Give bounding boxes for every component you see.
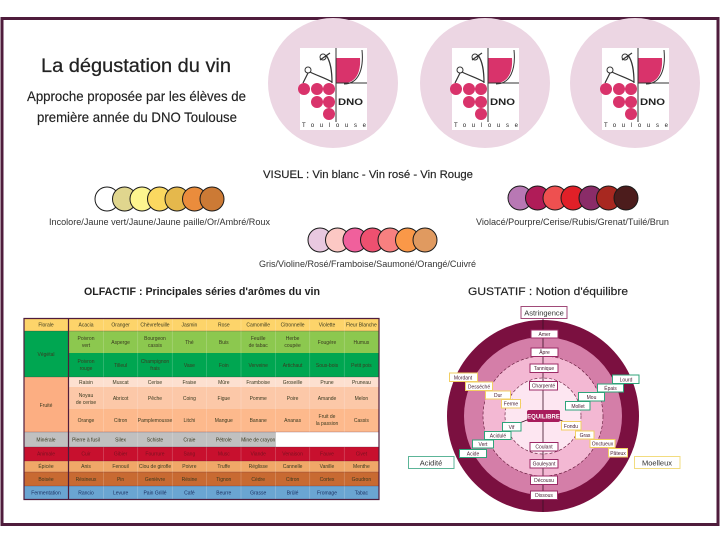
table: fruité rows: Groseille [283, 380, 303, 386]
table: végétal rows: frais [150, 366, 160, 372]
labels: jaune gauche: Dur [494, 393, 502, 399]
swatches: vin rouge [508, 186, 638, 210]
labels: axe vertical: Décousu [534, 478, 554, 484]
table: boisé row: Cortex [320, 477, 335, 483]
logo 1 [268, 18, 398, 148]
table: boisé row: Résineux [76, 477, 97, 483]
swatches: vin blanc [95, 187, 224, 211]
table: boisé row: Tignon [216, 477, 232, 483]
table: épicé row: Anis [81, 464, 91, 470]
logo 2: DNO [490, 97, 515, 107]
table: végétal rows: Bourgeon [144, 336, 166, 342]
table: header row: Camomille [246, 322, 270, 328]
table: végétal rows: Buis [219, 340, 229, 346]
table: fruité rows: Mûre [218, 380, 230, 386]
table: épicé row: Clou de girofle [139, 464, 171, 470]
label: vin rouge: Violacé/Pourpre/Cerise/Rubis/Grenat/Tuilé/Brun [476, 217, 669, 228]
table: fermentation row [31, 490, 369, 496]
table: fruité rows: Abricot [113, 396, 129, 402]
table: fruité rows: Cassis [354, 418, 369, 424]
table: minéral row [36, 438, 276, 444]
box: Moelleux [634, 456, 680, 468]
labels: axe vertical [532, 332, 556, 499]
logo 2: Toulouse [454, 123, 519, 129]
box: Acidité [408, 456, 454, 468]
label: vin blanc: Incolore/Jaune vert/Jaune/Jaune paille/Or/Ambré/Roux [49, 217, 270, 228]
labels: axe vertical: Tannique [534, 366, 554, 372]
table: fruité rows: Pomme [250, 396, 267, 402]
table: boisé row: Cèdre [251, 477, 265, 483]
table: épicé row: Réglisse [249, 464, 268, 470]
table: fruité rows: Citron [114, 418, 127, 424]
table: fermentation row: Pain Grillé [143, 490, 167, 496]
labels: vert droite [571, 378, 633, 410]
table: minéral row: Pétrole [216, 438, 232, 444]
table: épicé row: Épicée [38, 463, 54, 470]
table: animal row: Venaison [282, 452, 303, 458]
logo 3: DNO [640, 97, 665, 107]
table: végétal rows: rouge [80, 366, 93, 372]
table: fermentation row: Fermentation [31, 490, 61, 496]
table: minéral row: Craie [183, 438, 196, 444]
table: fermentation row: Rancio [78, 490, 94, 496]
table: végétal rows: Végétal [38, 352, 54, 358]
table: végétal rows: Foin [219, 363, 229, 369]
box: Astringence: Astringence [524, 308, 564, 318]
table: végétal rows: Sous-bois [316, 363, 339, 369]
table: animal row [37, 452, 368, 458]
table: animal row: Fourrure [145, 452, 165, 458]
labels: axe vertical: Amer [539, 332, 551, 338]
table: fermentation row: Brûlé [287, 490, 299, 496]
labels: jaune droite: Onctueux [592, 442, 614, 448]
table: fruité rows: Ananas [284, 418, 302, 424]
heading: olfactif: OLFACTIF : Principales séries d'arômes du vin [84, 286, 320, 298]
table: végétal rows: Feuille [251, 336, 266, 342]
table: animal row: Sang [184, 452, 195, 458]
labels: vert gauche [467, 425, 515, 458]
table: végétal rows: Poivron [78, 359, 95, 365]
table: animal row: Fauve [320, 452, 334, 458]
subtitle: Approche proposée par les élèves de [27, 88, 246, 104]
logo 2 [420, 18, 550, 148]
table: animal row: Cuir [81, 452, 91, 458]
box: Acidité: Acidité [420, 458, 442, 468]
table: végétal rows: coupée [284, 343, 301, 349]
table: boisé row: Genièvre [145, 477, 165, 483]
table: animal row: Viande [250, 452, 266, 458]
table: fermentation row: Levure [113, 490, 128, 496]
table: boisé row: Résine [182, 477, 197, 483]
table: fruité rows: Melon [355, 396, 368, 402]
boxes: vert gauche [460, 422, 521, 458]
table: header row: Violette [319, 322, 336, 328]
table: végétal rows: Tilleul [114, 363, 127, 369]
table: fruité rows: Poire [287, 396, 299, 402]
labels: vert gauche: Acide [467, 452, 479, 458]
table: fruité rows: Raisin [79, 380, 93, 386]
table: fermentation row: Tabac [355, 490, 369, 496]
table: boisé row: Citron [286, 477, 299, 483]
table: fermentation row: Fromage [317, 490, 337, 496]
table: header row: Chèvrefeuille [140, 322, 170, 328]
table: végétal rows: Humus [353, 340, 370, 346]
labels: vert gauche: Vert [479, 442, 488, 448]
heading: gustatif: GUSTATIF : Notion d'équilibre [468, 286, 628, 298]
table: végétal rows: Vase [184, 363, 195, 369]
table: végétal rows [38, 336, 372, 372]
table: végétal rows: Poivron [78, 336, 95, 342]
table: végétal rows: Verveine [248, 363, 268, 369]
table: fruité rows: Fruit de [319, 414, 336, 420]
box: Astringence [521, 306, 567, 318]
table: header row: Fleur Blanche [346, 322, 377, 328]
table: boisé row: Goudron [352, 477, 371, 483]
boxes: jaune gauche [450, 373, 520, 408]
labels: jaune droite: Fondu [564, 424, 578, 430]
labels: jaune droite [564, 424, 626, 457]
subtitle [27, 88, 246, 125]
labels: axe vertical: Dissous [535, 493, 553, 499]
table: fruité rows: Pêche [148, 396, 162, 402]
table: boisé row: Pin [117, 477, 124, 483]
labels: vert droite: Mou [587, 395, 597, 401]
table: fermentation row: Café [184, 490, 195, 496]
table: fruité rows: la passion [316, 421, 338, 427]
logo 3 [570, 18, 700, 148]
table: minéral row: Mine de crayon [241, 438, 276, 444]
table: fruité rows: Pruneau [352, 380, 371, 386]
table: épicé row: Fenouil [112, 464, 129, 470]
table: épicé row: Vanille [320, 464, 335, 470]
box: Moelleux: Moelleux [642, 458, 672, 468]
table: animal row: Gibier [114, 452, 128, 458]
table: animal row: Animale [37, 452, 55, 458]
table: fruité rows: Noyau [79, 393, 93, 399]
table: fermentation row: Grasse [250, 490, 266, 496]
table: végétal rows: Champignon [141, 359, 169, 365]
table: fruité rows: Fraise [182, 380, 197, 386]
logo 1: DNO [338, 97, 363, 107]
table: végétal rows: Artichaut [283, 363, 303, 369]
label: vin rosé: Gris/Violine/Rosé/Framboise/Saumoné/Orangé/Cuivré [259, 259, 476, 270]
table: végétal rows: Asperge [111, 340, 130, 346]
labels: jaune gauche: Desséché [468, 384, 490, 390]
table: végétal rows: Thé [185, 340, 194, 346]
table: header row: Citronnelle [281, 322, 305, 328]
labels: vert gauche: Vif [509, 425, 515, 431]
table: fruité rows: Muscat [113, 380, 129, 386]
heading: visuel: VISUEL : Vin blanc - Vin rosé - Vin Rouge [263, 169, 473, 181]
center: équilibre [527, 410, 560, 422]
labels: axe vertical: Coulant [535, 444, 553, 450]
table: header row: Jasmin [181, 322, 198, 328]
table: fruité rows: Figue [218, 396, 230, 402]
table: épicé row: Cannelle [283, 464, 303, 470]
table: fruité rows: Litchi [184, 418, 195, 424]
table: fruité rows [40, 380, 371, 427]
table: épicé row: Truffe [217, 464, 230, 470]
table: header row: Florale [38, 322, 54, 328]
labels: jaune gauche: Ferme [504, 402, 518, 408]
center: équilibre: EQUILIBRE [527, 414, 560, 420]
table: header row [38, 322, 377, 328]
labels: vert gauche: Acidulé [490, 434, 506, 440]
boxes: axe vertical [530, 330, 558, 500]
table: minéral row: Minérale [36, 438, 56, 444]
table: arômes [24, 318, 379, 500]
table: végétal rows: cassis [148, 343, 162, 349]
table: végétal rows: vert [82, 343, 91, 349]
table: header row: Acacia [78, 322, 94, 328]
table: végétal rows: Fougère [318, 340, 337, 346]
labels: axe vertical: Charpenté [532, 384, 555, 390]
table: fruité rows: Framboise [246, 380, 270, 386]
labels: axe vertical: Âpre [539, 349, 550, 356]
logo 3: Toulouse [604, 123, 669, 129]
table: épicé row [38, 463, 370, 470]
labels: jaune gauche [454, 376, 518, 408]
table: épicé row: Poivre [182, 464, 197, 470]
table: fruité rows: de cerise [76, 400, 96, 406]
table: animal row: Civet [356, 452, 368, 458]
swatches: vin rosé [308, 228, 437, 252]
table: header row: Oranger [111, 322, 130, 328]
logo 1: Toulouse [302, 123, 367, 129]
labels: vert droite: Mollet [571, 404, 585, 410]
chart: roue d'équilibre [447, 306, 639, 512]
labels: jaune gauche: Mordant [454, 376, 473, 382]
table: fruité rows: Pamplemousse [138, 418, 172, 424]
table: fruité rows: Coing [183, 396, 196, 402]
table: boisé row: Boisée [38, 477, 54, 483]
subtitle: première année du DNO Toulouse [37, 109, 237, 125]
table: végétal rows: Petit pois [351, 363, 372, 369]
table: fruité rows: Fruité [40, 403, 53, 409]
table: header row: Rose [218, 322, 230, 328]
table: minéral row: Pierre à fusil [72, 438, 100, 444]
table: fermentation row: Beurre [216, 490, 232, 496]
table: minéral row: Silex [115, 438, 127, 444]
table: animal row: Musc [218, 452, 230, 458]
table: fruité rows: Amande [318, 396, 337, 402]
title: La dégustation du vin [41, 55, 231, 77]
table: fruité rows: Orange [78, 418, 95, 424]
table: végétal rows: Herbe [286, 336, 300, 342]
labels: vert droite: Lourd [620, 378, 633, 384]
labels: axe vertical: Gouleyant [533, 462, 556, 468]
table: fruité rows: Cerise [148, 380, 162, 386]
boxes: jaune droite [562, 422, 628, 457]
table: fruité rows: Banane [250, 418, 267, 424]
table: épicé row: Menthe [353, 464, 370, 470]
boxes: vert droite [566, 375, 639, 410]
table: végétal rows: de tabac [249, 343, 268, 349]
table: boisé row [38, 477, 371, 483]
table: minéral row: Schiste [147, 438, 163, 444]
labels: jaune droite: Gras [580, 433, 591, 439]
table: fruité rows: Mangue [215, 418, 233, 424]
labels: jaune droite: Pâteux [610, 451, 626, 457]
table: fruité rows: Prune [320, 380, 334, 386]
labels: vert droite: Épais [604, 385, 617, 392]
